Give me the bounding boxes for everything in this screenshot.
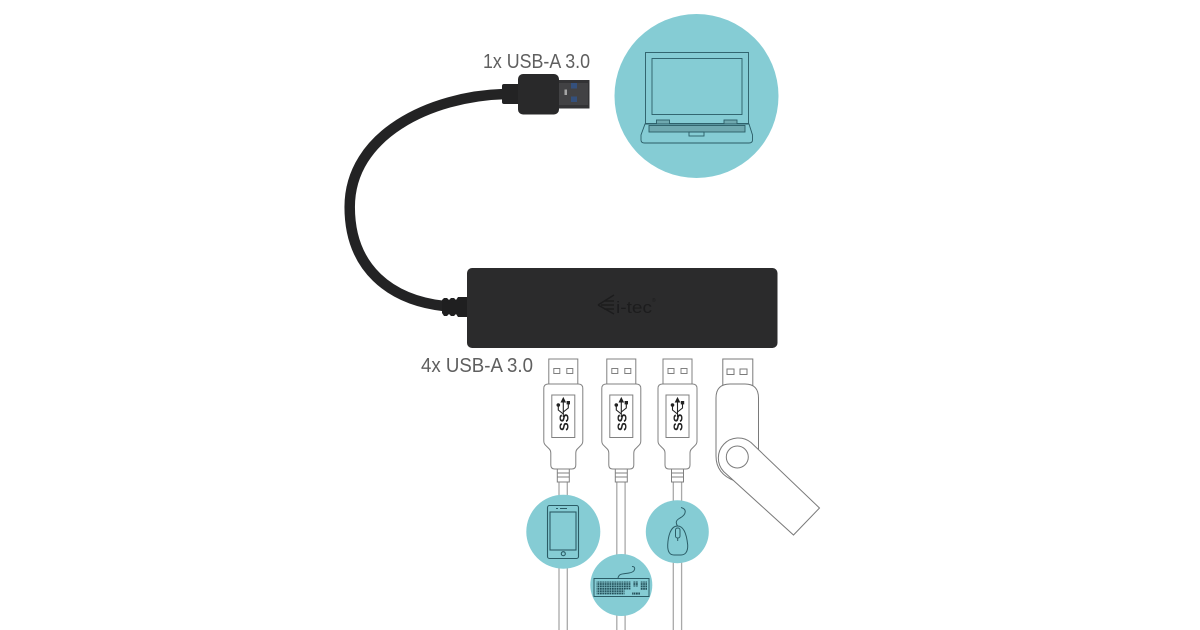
logo: i-tec: [598, 295, 656, 317]
label: upstream port: 1x USB-A 3.0: [483, 51, 590, 73]
icon: keyboard circle: [590, 554, 652, 616]
usb plug 3: [658, 359, 697, 482]
panel: laptop circle: [614, 14, 778, 178]
usb plug 1: [544, 359, 583, 482]
usb plug 2: [602, 359, 641, 482]
panel: hub body: [442, 268, 778, 348]
icon: phone circle: [526, 495, 600, 569]
usb flash drive: [716, 359, 820, 535]
logo: i-tec: i-tec: [616, 298, 653, 317]
icon: mouse circle: [646, 500, 709, 563]
cables below plugs: [559, 482, 682, 630]
usb-a connector: [502, 74, 590, 114]
cable: [350, 94, 505, 306]
label: downstream ports: 4x USB-A 3.0: [421, 355, 533, 377]
strain relief: [442, 297, 467, 317]
logo: i-tec: ®: [652, 297, 656, 304]
icon: laptop: [641, 52, 752, 143]
